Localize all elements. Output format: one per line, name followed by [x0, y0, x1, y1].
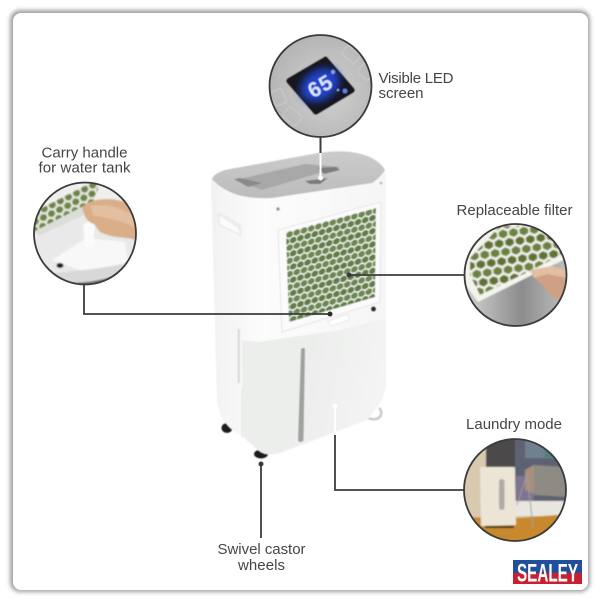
label: LED screen: screen	[378, 85, 424, 102]
hand	[82, 199, 140, 240]
mini dehumidifier	[480, 467, 516, 526]
skirting	[515, 501, 570, 516]
callout: replaceable filter photo	[464, 223, 568, 327]
leader: LED	[318, 136, 323, 180]
room beyond	[514, 440, 565, 502]
label: castor wheels: Swivel castor	[218, 541, 306, 558]
label: LED screen: Visible LED	[378, 70, 454, 87]
label: carry handle: Carry handle	[42, 144, 128, 162]
drying rack laundry	[533, 465, 568, 497]
side slot	[238, 329, 240, 383]
LED reading: 65	[304, 70, 337, 103]
label: castor wheels	[218, 541, 306, 574]
shadow base	[55, 264, 124, 283]
filter sheet	[466, 224, 564, 302]
top recessed panel	[235, 164, 340, 190]
filter panel	[278, 202, 381, 332]
body shell	[211, 151, 386, 454]
wooden floor	[472, 514, 559, 540]
side handle recess	[217, 213, 242, 237]
hexagon filter mesh	[286, 208, 376, 322]
panel pull tab	[328, 314, 349, 326]
control panel	[305, 178, 328, 184]
label: replaceable filter: Replaceable filter	[456, 202, 572, 219]
leader: carry handle	[84, 284, 332, 316]
panel latch hole	[371, 306, 376, 312]
top cap	[212, 151, 385, 198]
dehumidifier product	[211, 151, 386, 459]
callout: LED screen photo	[268, 34, 372, 138]
callout: carry handle photo	[33, 182, 137, 286]
label: castor wheels: wheels	[237, 557, 285, 574]
dark wall	[486, 436, 516, 468]
castor wheels	[222, 408, 381, 458]
tray	[40, 215, 86, 240]
rear screw top	[276, 207, 280, 211]
top vent right	[318, 167, 340, 174]
icon: faint buttons	[270, 45, 375, 126]
label: LED screen	[378, 70, 454, 102]
callout: laundry mode photo	[463, 438, 567, 542]
label: carry handle	[38, 144, 131, 176]
label: carry handle: for water tank	[38, 160, 131, 176]
top vent left	[234, 178, 262, 187]
leader: laundry	[332, 404, 464, 490]
hole	[56, 263, 64, 268]
hex filter	[35, 184, 99, 232]
handle	[83, 222, 95, 239]
water level window	[298, 348, 305, 442]
hand	[535, 274, 566, 301]
leader: filter	[346, 272, 465, 278]
label: laundry mode: Laundry mode	[466, 416, 562, 433]
LED screen	[286, 56, 355, 115]
tank edge line	[241, 388, 243, 437]
water tank front	[242, 318, 386, 454]
leader: castor	[258, 462, 264, 538]
rack legs	[517, 474, 533, 527]
